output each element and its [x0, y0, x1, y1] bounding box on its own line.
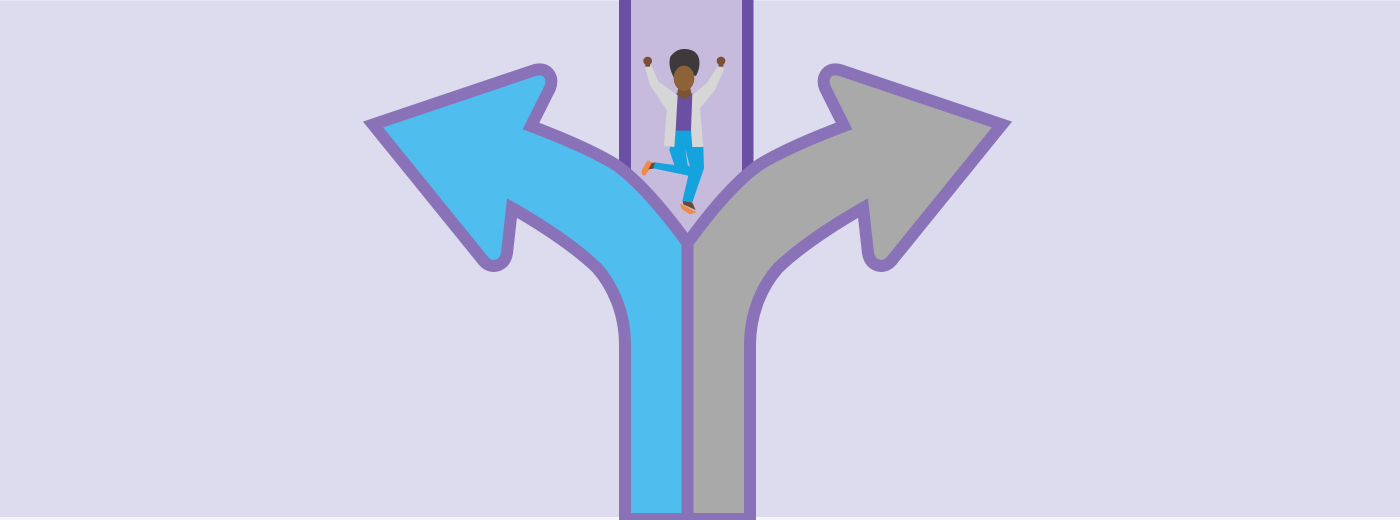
shoe: front foot	[680, 203, 697, 214]
foot: back	[648, 162, 656, 169]
neck	[677, 87, 692, 99]
trousers	[653, 128, 704, 202]
arrow: blue, pointing left	[373, 69, 688, 519]
torso: purple top	[676, 93, 692, 131]
fists	[643, 57, 725, 67]
corridor: straight path behind the arrows	[619, 0, 754, 250]
face	[674, 66, 694, 91]
foot: front	[683, 200, 696, 210]
gap between the legs	[685, 149, 690, 167]
shoe: back foot	[642, 160, 652, 176]
figure: jumping person	[642, 49, 725, 214]
coat and raised arms	[645, 66, 724, 147]
hair	[670, 49, 700, 77]
legs and shoes	[642, 128, 704, 214]
arrow: grey, pointing right	[688, 69, 1002, 519]
